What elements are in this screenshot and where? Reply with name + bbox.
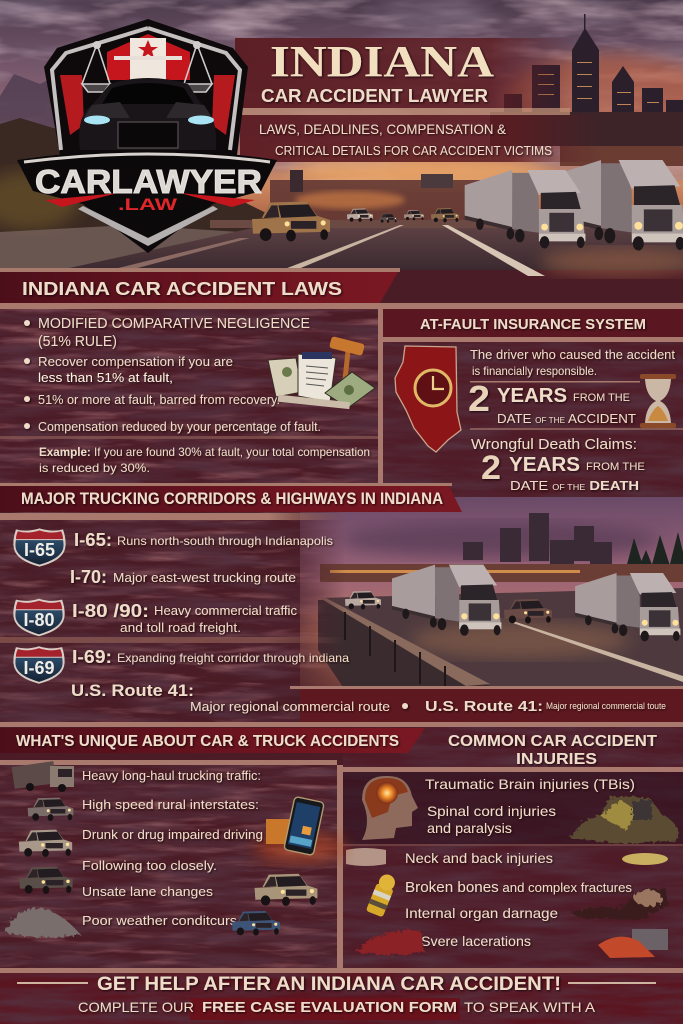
list of injuries: Spinal cord injuries — [427, 803, 556, 819]
heading: COMMON CAR ACCIDENT — [448, 733, 658, 750]
list: comparative negligence: (51% RULE) — [38, 333, 117, 350]
list of injuries: Broken bones and complex fractures — [405, 879, 632, 896]
highway descriptions: I-80 /90: — [72, 601, 149, 621]
deadline text: DATE OF THE DEATH — [510, 478, 639, 493]
city lights — [320, 564, 683, 582]
car — [504, 599, 552, 624]
list: comparative negligence: is reduced by 30%. — [39, 461, 150, 475]
subtitle line two: CRITICAL DETAILS FOR CAR ACCIDENT VICTIMS — [275, 143, 552, 158]
highway shield I-65: I-65 — [24, 540, 55, 560]
call to action text: COMPLETE OUR — [78, 999, 194, 1015]
banner: Indiana car accident laws — [0, 268, 683, 309]
brand name: CARLAWYER — [35, 163, 262, 200]
deadline text: is financially responsible. — [472, 364, 597, 378]
deadline text: FROM THE — [573, 392, 630, 404]
call to action text — [78, 999, 596, 1016]
deadline text: FROM THE — [586, 461, 645, 473]
panel: highway list — [0, 512, 683, 724]
heading: INJURIES — [516, 751, 597, 768]
deadline text: YEARS — [497, 385, 567, 407]
panel: common injuries — [343, 727, 683, 968]
highway shield I-69: I-69 — [23, 658, 55, 678]
icon: neck brace — [346, 848, 386, 866]
skyline — [504, 14, 683, 136]
list of risk factors: Unsate lane changes — [82, 884, 214, 899]
heading: AT-FAULT INSURANCE SYSTEM — [420, 316, 646, 333]
distant car — [347, 208, 373, 222]
icon: box truck — [12, 761, 74, 792]
highway scene — [300, 497, 683, 692]
icon: luggage — [632, 929, 668, 950]
list of risk factors: Heavy long-haul trucking traffic: — [82, 768, 261, 783]
highway descriptions: Major regional commercial toute — [546, 701, 666, 711]
truck right — [575, 573, 680, 641]
flag crest — [107, 34, 190, 80]
black car front — [79, 78, 216, 150]
list of risk factors: Poor weather conditcurs — [82, 913, 238, 928]
name ribbon — [17, 150, 277, 253]
call to action footer — [0, 968, 683, 1024]
panel: what's unique — [0, 727, 425, 968]
heading: INDIANA CAR ACCIDENT LAWS — [22, 279, 342, 299]
skyline — [463, 513, 612, 566]
highway descriptions: U.S. Route 41: — [71, 681, 194, 700]
icon: arm cast — [366, 872, 398, 917]
deadline text: 2 — [468, 378, 490, 419]
list of injuries: Neck and back injuries — [405, 850, 553, 866]
brand domain: .LAW — [118, 195, 178, 214]
icon: wrecked car — [570, 796, 678, 844]
road — [60, 226, 683, 270]
heading: GET HELP AFTER AN INDIANA CAR ACCIDENT! — [97, 974, 561, 995]
call to action text: TO SPEAK WITH A — [464, 999, 596, 1015]
heading: Indiana: INDIANA — [270, 37, 494, 86]
highway descriptions: I-65: — [74, 530, 112, 550]
icon: blue car in storm — [232, 911, 280, 936]
list: comparative negligence: Recover compensation if you are — [38, 354, 233, 369]
icon: beer glass — [266, 819, 292, 844]
icon: gavel, documents and cash — [268, 336, 375, 409]
icon: pillow and debris — [622, 853, 668, 865]
list of risk factors — [82, 768, 263, 928]
icon: laceration debris — [355, 930, 424, 955]
list of injuries: Traumatic Brain injuries (TBis) — [425, 776, 635, 792]
panel: at-fault insurance system — [378, 309, 683, 497]
logo: CarLawyer.law shield — [17, 19, 277, 253]
highway shield I-65 — [13, 528, 66, 567]
icon: smartphone — [284, 796, 324, 856]
icon: SUV — [19, 830, 72, 857]
traffic — [345, 591, 381, 609]
list: comparative negligence: less than 51% at fault, — [38, 370, 173, 385]
highway descriptions: U.S. Route 41: — [425, 698, 543, 715]
icon: pickup — [19, 867, 73, 894]
list of risk factors: High speed rural interstates: — [82, 797, 259, 812]
highway descriptions — [70, 530, 666, 715]
truck rear — [546, 160, 683, 251]
left treeline and terrain — [0, 118, 290, 270]
highway shield I-80 — [13, 599, 65, 636]
highway shield I-80: I-80 — [23, 610, 55, 630]
roadway — [320, 588, 683, 690]
subtitle line one: LAWS, DEADLINES, COMPENSATION & — [259, 121, 507, 137]
deadline text: Wrongful Death Claims: — [471, 436, 637, 453]
highway descriptions: I-70: — [70, 567, 107, 587]
icon: state map with clock — [395, 346, 461, 452]
heading: car accident lawyer: CAR ACCIDENT LAWYER — [261, 86, 488, 106]
list of risk factors: Following too closely. — [82, 858, 217, 873]
divider stripe — [0, 722, 683, 727]
heading: WHAT'S UNIQUE ABOUT CAR & TRUCK ACCIDENTS — [16, 733, 399, 750]
list: comparative negligence — [24, 315, 370, 475]
icon: red car wreck — [598, 937, 655, 958]
hero vehicles — [252, 160, 683, 251]
red side panels — [60, 75, 84, 135]
list of injuries: Svere lacerations — [421, 933, 531, 949]
city lights band — [560, 146, 683, 166]
guardrail — [318, 600, 490, 690]
deadline text — [468, 347, 675, 493]
highway shield I-69 — [13, 646, 65, 684]
highway descriptions: and toll road freight. — [120, 620, 241, 635]
list: comparative negligence: Example: If you are found 30% at fault, your total compensation — [39, 445, 370, 459]
title panel — [235, 37, 600, 162]
heading — [448, 733, 658, 768]
list: comparative negligence: Compensation reduced by your percentage of fault. — [38, 419, 321, 434]
highway descriptions: Runs north-south through Indianapolis — [117, 534, 333, 548]
icon: hourglass — [640, 374, 676, 428]
truck front — [465, 170, 585, 248]
list of injuries: and paralysis — [427, 820, 512, 836]
truck — [392, 565, 501, 636]
highway descriptions: Major regional commercial route — [190, 699, 390, 714]
crest knobs — [93, 41, 201, 49]
highway descriptions: Expanding freight corridor through indiana — [117, 651, 349, 665]
heading: MAJOR TRUCKING CORRIDORS & HIGHWAYS IN INDIANA — [21, 489, 443, 508]
suv — [252, 202, 330, 241]
deadline text: DATE OF THE ACCIDENT — [497, 411, 636, 426]
icon: broken rock — [570, 888, 668, 920]
banner: major trucking corridors — [0, 483, 462, 512]
deadline text: YEARS — [509, 454, 580, 476]
scales of justice — [82, 44, 212, 92]
deadline text: 2 — [481, 449, 501, 487]
list of risk factors: Drunk or drug impaired driving — [82, 827, 263, 842]
highway descriptions: Heavy commercial traffic — [154, 603, 297, 618]
panel: laws — [0, 309, 378, 483]
list of injuries — [405, 776, 635, 949]
icon: sedan — [255, 874, 317, 906]
deadline text: The driver who caused the accident — [470, 347, 675, 362]
list: comparative negligence: MODIFIED COMPARATIVE NEGLIGENCE — [38, 315, 310, 332]
icon: grey car — [28, 798, 73, 821]
call to action text: FREE CASE EVALUATION FORM — [202, 999, 457, 1016]
highway descriptions: I-69: — [72, 647, 112, 667]
icon: head with brain — [362, 776, 418, 840]
icon: rubble pile — [5, 908, 80, 938]
list of injuries: Internal organ darnage — [405, 905, 558, 921]
list: comparative negligence: 51% or more at fault, barred from recovery. — [38, 392, 280, 407]
distant traffic — [379, 208, 459, 223]
highway descriptions: Major east-west trucking route — [113, 570, 296, 585]
trees — [625, 532, 683, 574]
hero: sunset highway scene — [0, 0, 683, 276]
